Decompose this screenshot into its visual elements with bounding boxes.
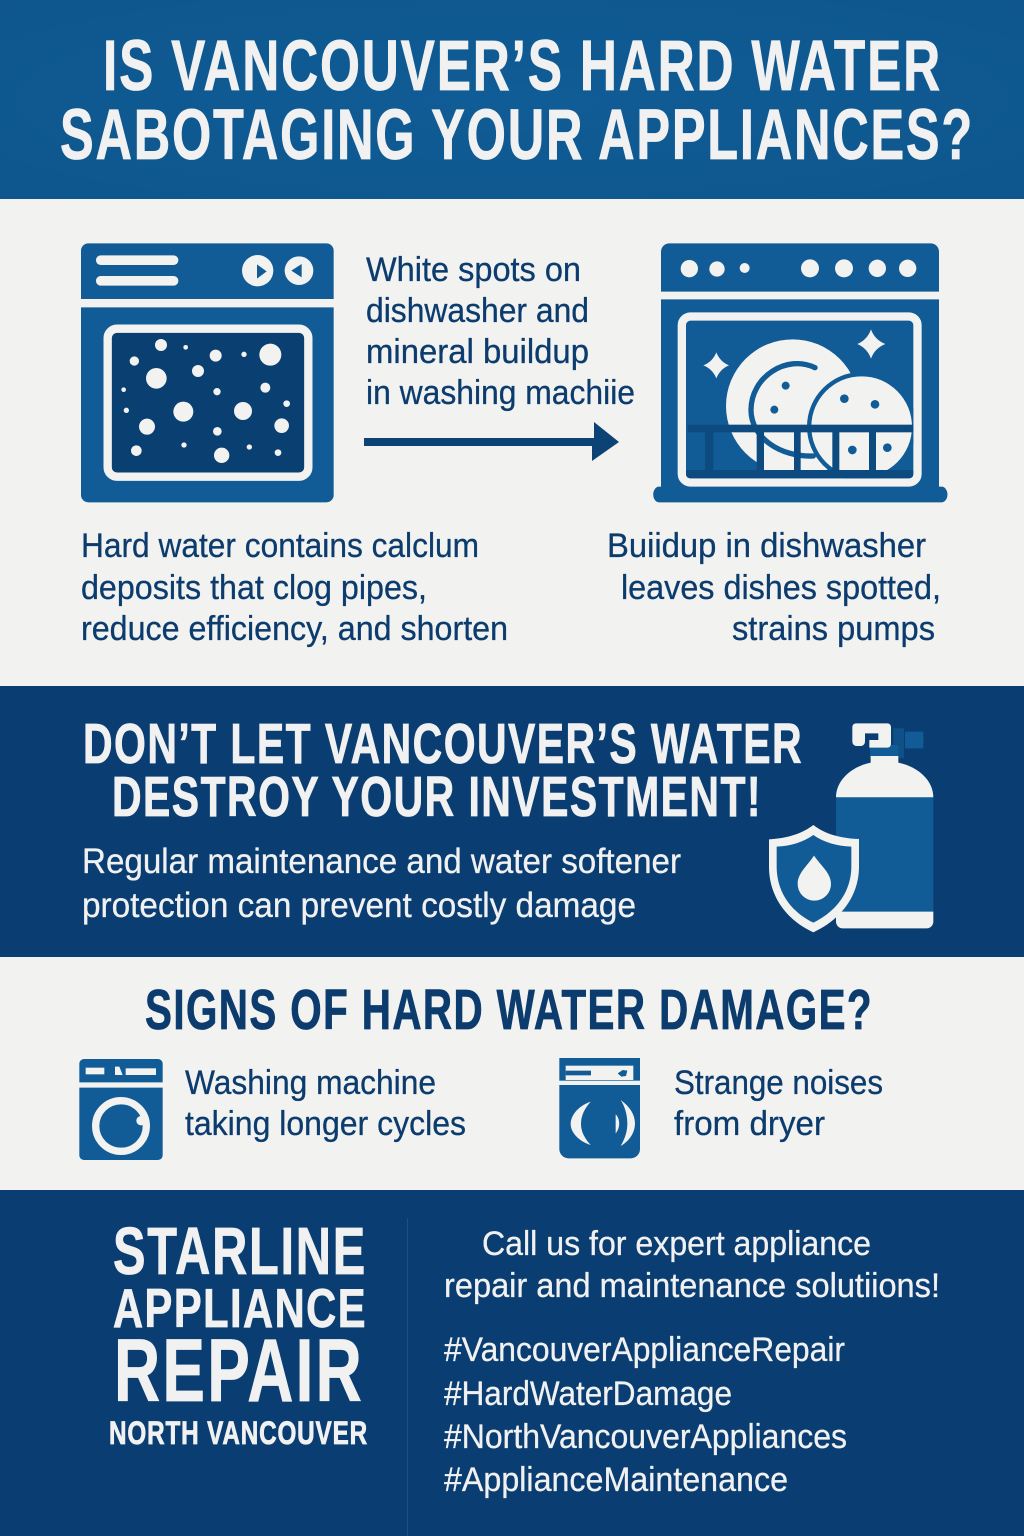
text: washing machine sign: taking longer cycles [185, 1105, 466, 1143]
text: washing machine sign [185, 1064, 466, 1143]
arrow [364, 422, 619, 461]
text: dishwasher buildup explanation: Buiidup in dishwasher [607, 527, 926, 565]
text: maintenance advice: Regular maintenance and water softener [82, 842, 681, 881]
text: maintenance advice: protection can prevent costly damage [82, 886, 636, 925]
brand logo text: APPLIANCE [113, 1277, 367, 1339]
icon: washing machine drum with mineral spots [81, 243, 334, 502]
text: hashtags: #ApplianceMaintenance [444, 1461, 788, 1499]
panel: footer [0, 1190, 1024, 1536]
text: hashtags: #NorthVancouverAppliances [444, 1418, 847, 1456]
brand logo text: STARLINE [113, 1214, 367, 1289]
text: dishwasher buildup explanation: strains pumps [732, 610, 935, 648]
icon: washing machine [79, 1059, 163, 1160]
text: white spots caption: dishwasher and [366, 292, 589, 330]
icon: dryer [559, 1058, 640, 1158]
panel: protection call-out [0, 686, 1024, 957]
brand logo text [109, 1214, 368, 1451]
text: call to action: Call us for expert appliance [482, 1225, 871, 1263]
text: dryer sign: Strange noises [674, 1064, 883, 1102]
text: white spots caption [366, 251, 635, 412]
text: hashtags: #VancouverApplianceRepair [444, 1331, 845, 1369]
text: hard water explanation: Hard water contains calclum [81, 527, 479, 565]
text: call to action [444, 1225, 940, 1305]
text: hard water explanation: deposits that clog pipes, [81, 569, 427, 607]
text: hashtags [444, 1331, 847, 1499]
panel: signs of hard water damage [0, 957, 1024, 1190]
brand logo text: NORTH VANCOUVER [109, 1415, 368, 1451]
text: maintenance advice [82, 842, 681, 925]
title [60, 27, 974, 175]
heading: don't let water destroy investment: DESTROY YOUR INVESTMENT! [112, 765, 762, 829]
text: call to action: repair and maintenance solutiions! [444, 1267, 940, 1305]
text: washing machine sign: Washing machine [185, 1064, 436, 1102]
text: white spots caption: White spots on [366, 251, 581, 289]
brand logo text: REPAIR [114, 1320, 364, 1420]
icon: softener bottle and shield [769, 723, 933, 932]
panel: header [0, 0, 1024, 199]
text: white spots caption: mineral buildup [366, 333, 589, 371]
icon: dishwasher with spotted dishes [653, 243, 947, 502]
text: white spots caption: in washing machiie [366, 374, 635, 412]
panel: hard water effects [80, 243, 948, 648]
text: hashtags: #HardWaterDamage [444, 1375, 732, 1413]
text: dishwasher buildup explanation: leaves dishes spotted, [621, 569, 941, 607]
text: hard water explanation [81, 527, 508, 648]
heading: don't let water destroy investment [83, 712, 803, 829]
text: hard water explanation: reduce efficiency, and shorten [81, 610, 508, 648]
text: dryer sign [674, 1064, 883, 1143]
text: dryer sign: from dryer [674, 1105, 825, 1143]
text: dishwasher buildup explanation [607, 527, 941, 648]
